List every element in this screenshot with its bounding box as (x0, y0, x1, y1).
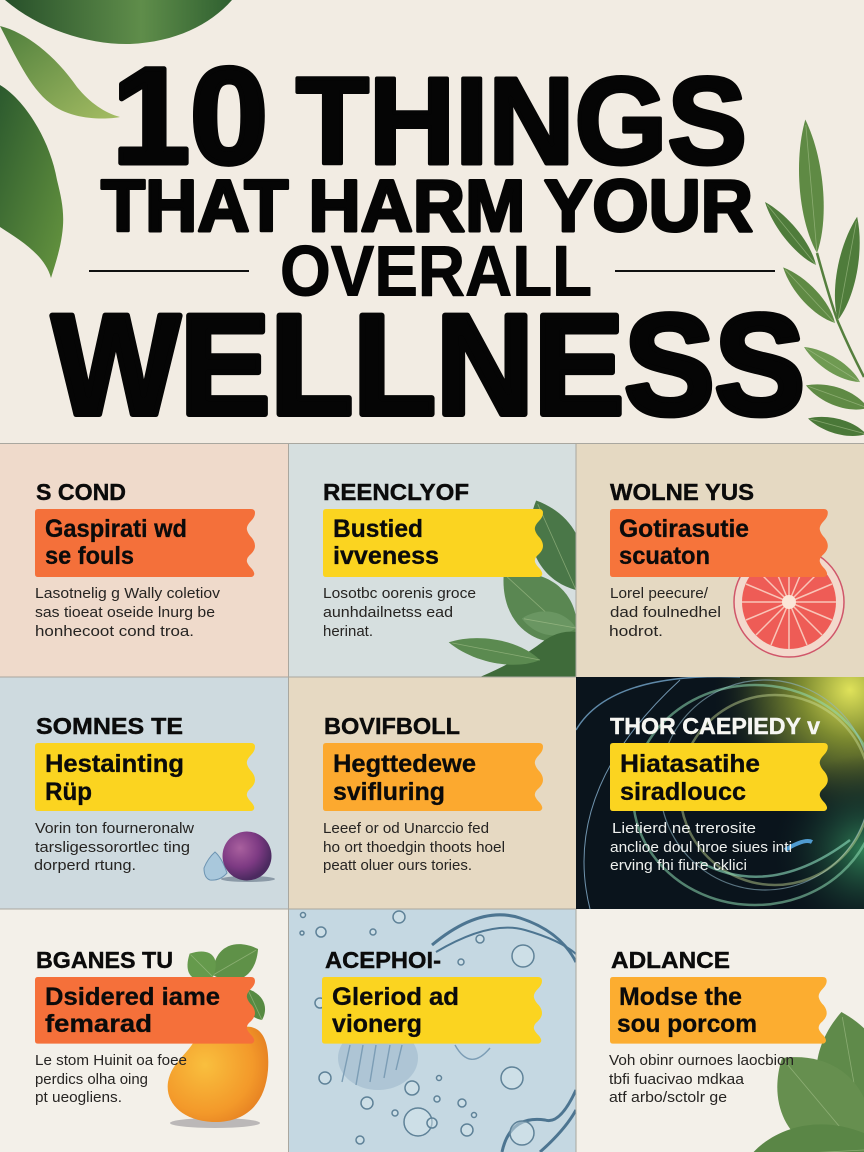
panel: card 8 water: ACEPHOI- (325, 947, 441, 973)
panel: card 4: Hestainting (45, 750, 184, 778)
panel: card 2: Bustied (333, 515, 423, 543)
panel: card 6 dark: anclioe doul hroe siues inti (610, 840, 792, 856)
panel: card 2: aunhdailnetss ead (323, 605, 453, 621)
panel: card 3 (576, 443, 864, 677)
panel: card 9: sou porcom (617, 1010, 757, 1038)
illustration: leaf cluster (448, 500, 576, 676)
panel: card 1: se fouls (45, 542, 134, 570)
panel: card 2: herinat. (323, 624, 373, 640)
panel: card 4: tarsligessorortlec ting (35, 840, 190, 856)
panel: card 8 water (289, 909, 576, 1152)
illustration: green leaves (749, 1006, 864, 1152)
panel: card 8 water: Gleriod ad (332, 983, 459, 1011)
title: THINGS (296, 54, 747, 190)
panel: card 2 (289, 443, 597, 677)
panel: card 6 dark: Lietierd ne trerosite (612, 821, 756, 837)
panel: card 5: Leeef or od Unarccio fed (323, 821, 489, 837)
panel: card 1: honhecoot cond troa. (35, 624, 194, 640)
panel: card 6 dark: Hiatasatihe (620, 750, 760, 778)
illustration: mango (168, 934, 270, 1128)
title: OVERALL (280, 232, 592, 312)
panel: card 4: Vorin ton fourneronalw (35, 821, 195, 837)
title: THAT HARM YOUR (101, 166, 753, 247)
panel: card 9: atf arbo/sctolr ge (609, 1090, 727, 1106)
panel: card 1: Gaspirati wd (45, 515, 187, 543)
panel: card 9 (609, 952, 864, 1152)
illustration: water splash and bubbles (300, 911, 576, 1152)
panel: card 3: Lorel peecure/ (610, 586, 709, 602)
panel: card 5: peatt oluer ours tories. (323, 858, 472, 874)
title (52, 40, 805, 445)
panel: card 1 (0, 443, 289, 677)
illustration: grapefruit (734, 547, 844, 657)
panel: card 4: SOMNES TE (36, 713, 183, 739)
panel: card 7: femarad (45, 1010, 152, 1038)
decorative branch top right (759, 119, 864, 441)
panel: card 8 water: vionerg (332, 1010, 422, 1038)
panel: card 9: Voh obinr ournoes laocbion (609, 1053, 794, 1069)
panel: card 7: perdics olha oing (35, 1072, 148, 1088)
panel: card 1: S COND (36, 479, 126, 505)
panel: card 5: ho ort thoedgin thoots hoel (323, 840, 505, 856)
panel: card 4: Rüp (45, 778, 92, 806)
panel: card 5: svifluring (333, 778, 445, 806)
panel: card 5: BOVIFBOLL (324, 713, 460, 739)
panel: card 4: dorperd rtung. (34, 858, 136, 874)
panel: card 7: Dsidered iame (45, 983, 220, 1011)
panel: card 6 dark: siradloucc (620, 778, 746, 806)
panel: card 5 (289, 677, 576, 909)
illustration: purple ball and crystal (204, 832, 275, 882)
panel: card 3: scuaton (619, 542, 710, 570)
panel: card 6 dark: THOR CAEPIEDY v (610, 713, 820, 739)
panel: card 3: Gotirasutie (619, 515, 749, 543)
panel: card 7: pt ueogliens. (35, 1090, 122, 1106)
panel: card 1: Lasotnelig g Wally coletiov (35, 586, 221, 602)
panel: card 3: hodrot. (609, 624, 663, 640)
panel: card 9: tbfi fuacivao mdkaa (609, 1072, 745, 1088)
panel: card 7: BGANES TU (36, 947, 173, 973)
panel: card 9: Modse the (619, 983, 742, 1011)
panel: card 2: REENCLYOF (323, 479, 469, 505)
panel: card 2: Losotbc oorenis groce (323, 586, 476, 602)
panel: card 3: WOLNE YUS (610, 479, 754, 505)
panel: card 4 (0, 677, 289, 909)
panel: card 7 (0, 909, 289, 1152)
panel: card 1: sas tioeat oseide lnurg be (35, 605, 215, 621)
panel: card 9: ADLANCE (611, 947, 730, 973)
panel: card 5: Hegttedewe (333, 750, 476, 778)
panel: card 6 dark: erving fhi fiure cklici (610, 858, 747, 874)
title rules (89, 270, 775, 272)
panel: card 7: Le stom Huinit oa foee (35, 1053, 187, 1069)
panel: card 3: dad foulnedhel (610, 605, 721, 621)
decorative leaves top left (0, 0, 232, 278)
panel: card 6 dark (576, 677, 864, 909)
panel: card 2: ivveness (333, 542, 439, 570)
title: 10 (112, 40, 268, 193)
illustration: glowing swirl (576, 677, 864, 909)
title: WELLNESS (52, 286, 805, 445)
